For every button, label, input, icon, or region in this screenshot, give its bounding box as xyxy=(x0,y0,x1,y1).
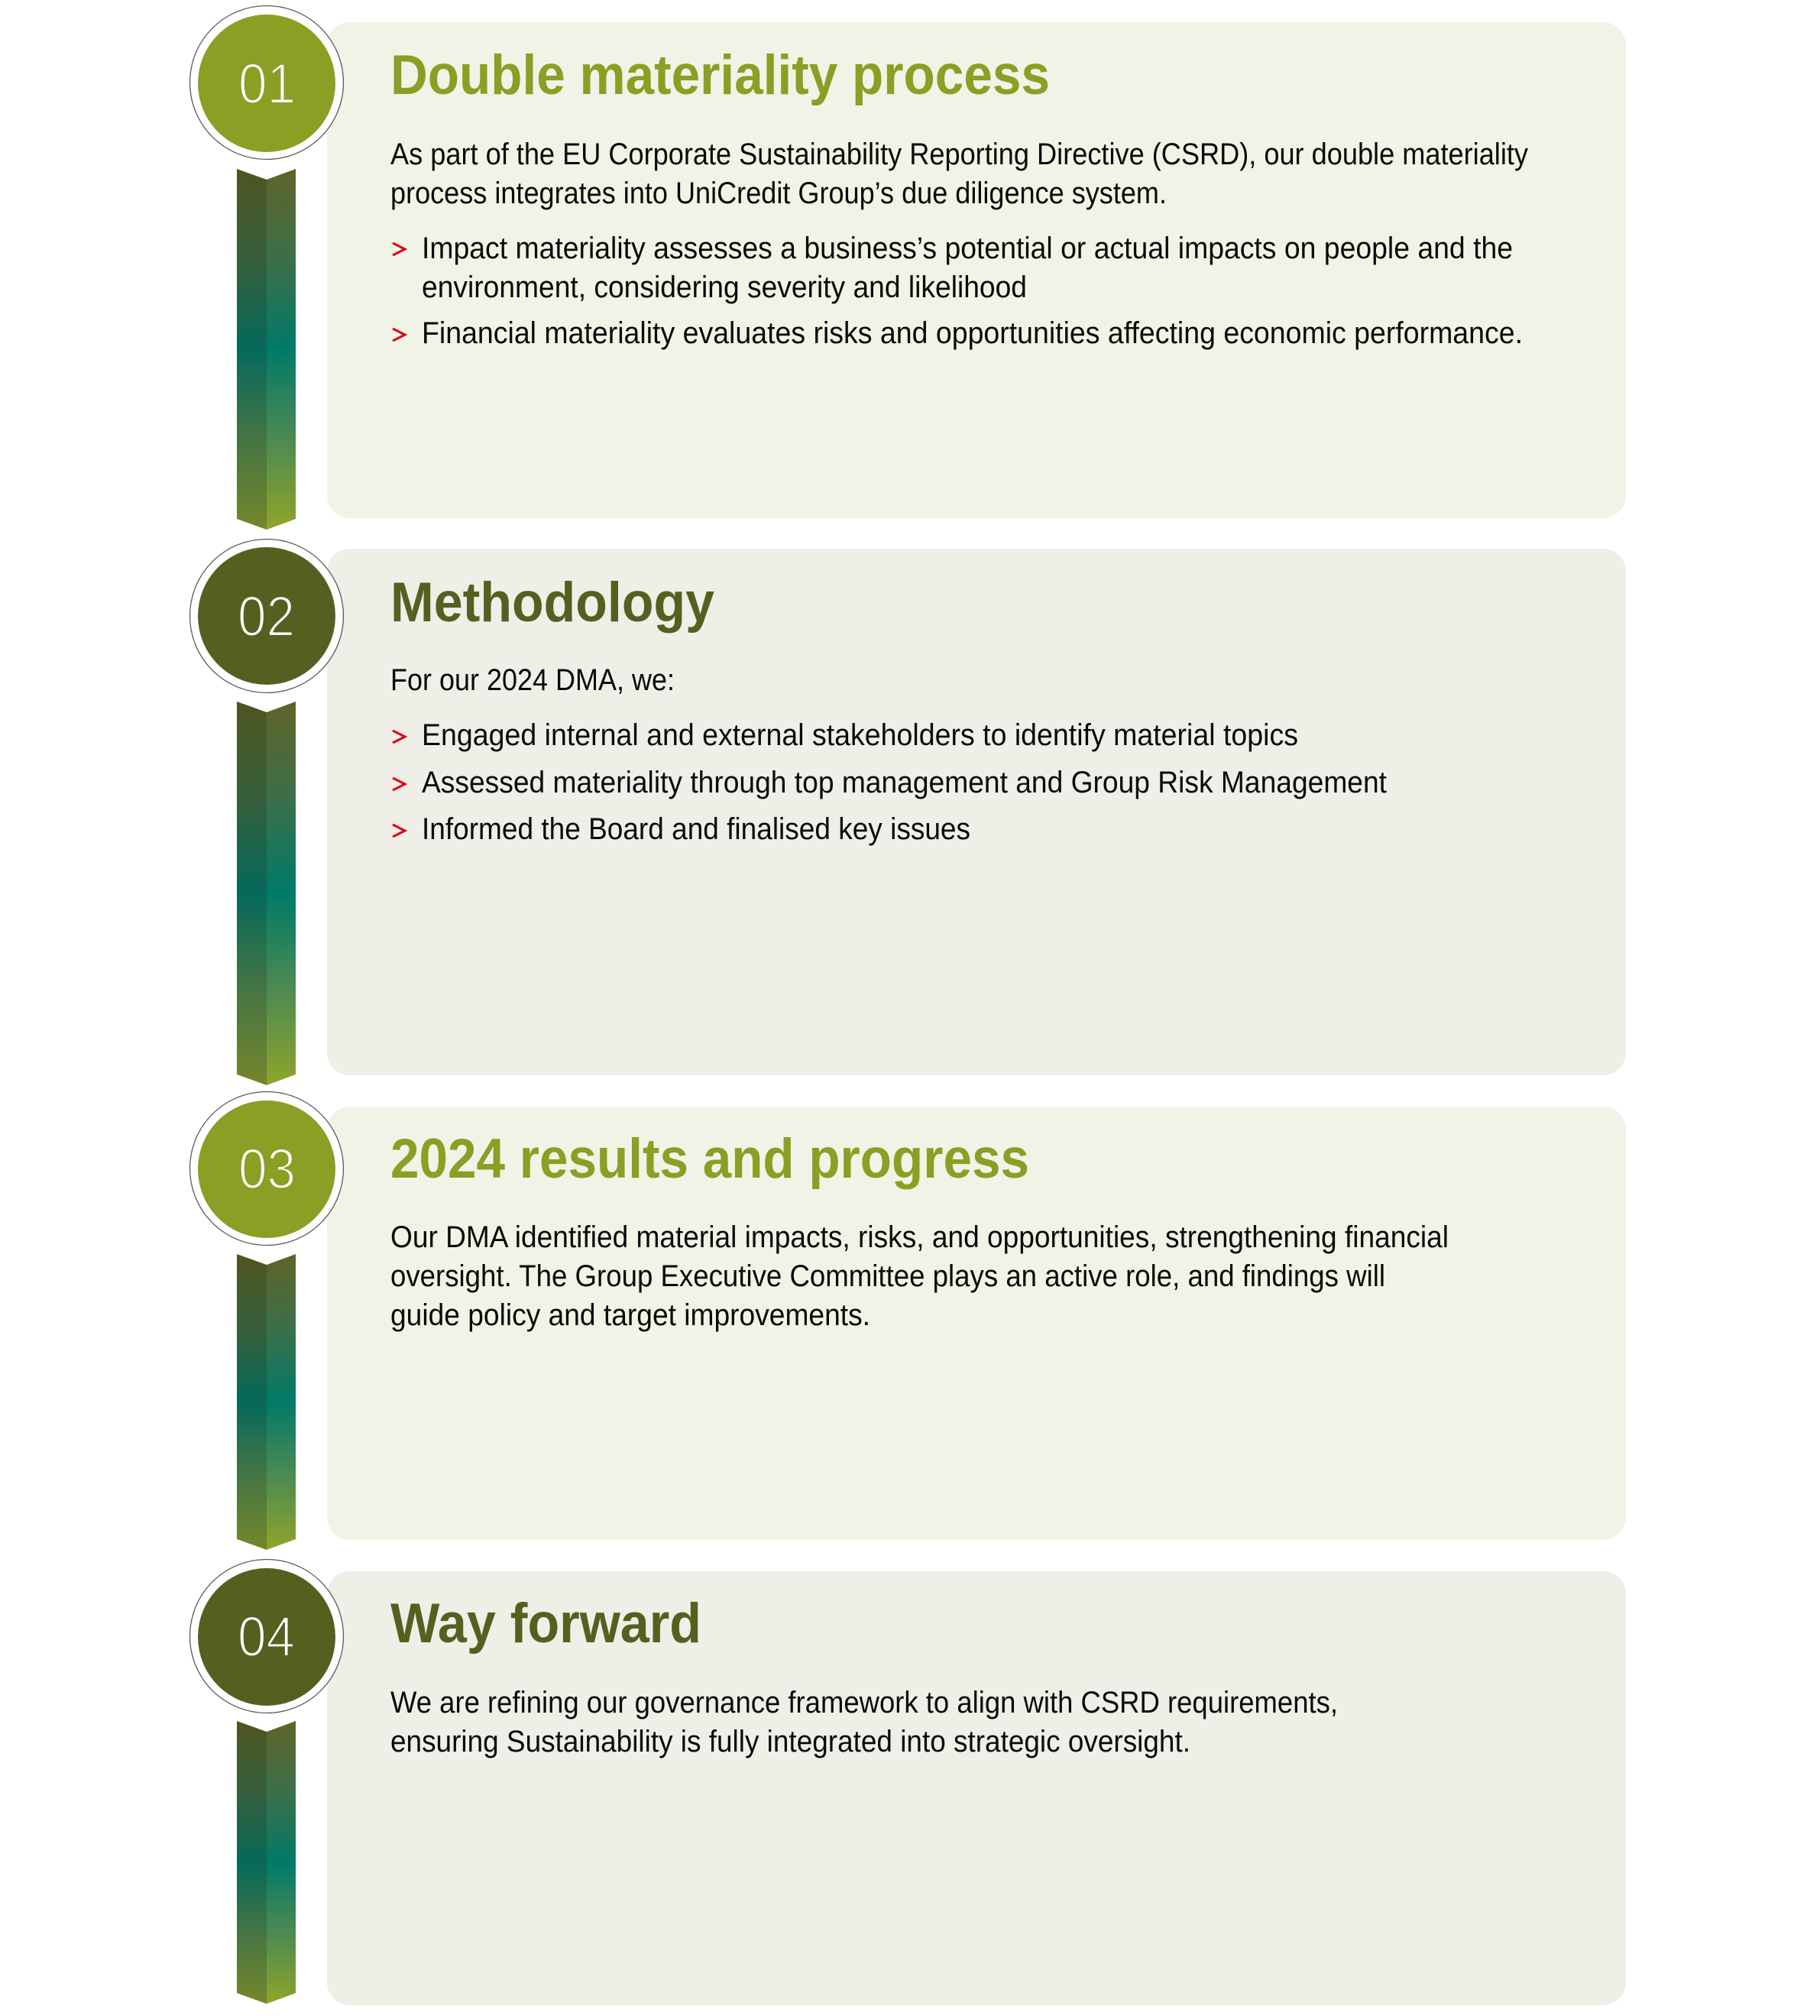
badge: 04 xyxy=(189,1559,344,1713)
bullet: impact materiality: environment, considering severity and likelihood xyxy=(422,271,1027,304)
bullet: assessed: Assessed materiality through top management and Group Risk Management xyxy=(422,766,1387,799)
text block: results: guide policy and target improvements. xyxy=(390,1298,870,1332)
heading: double materiality process: Double materiality process xyxy=(390,44,1050,106)
text block: way forward xyxy=(390,1686,1338,1758)
bullet: informed: Informed the Board and finalised key issues xyxy=(422,812,970,846)
text block: results: oversight. The Group Executive Committee plays an active role, and findings will xyxy=(390,1259,1385,1293)
bullet: engaged: Engaged internal and external stakeholders to identify material topics xyxy=(422,718,1298,752)
panel: methodology xyxy=(327,549,1626,1075)
arrow: ribbon 4 xyxy=(237,1721,296,2004)
badge: 03: 03 xyxy=(238,1137,296,1201)
arrow: ribbon 1 xyxy=(237,169,296,530)
bullet: impact materiality xyxy=(393,232,1513,304)
text block: way forward: ensuring Sustainability is fully integrated into strategic oversight. xyxy=(390,1725,1190,1758)
text block: way forward: We are refining our governance framework to align with CSRD requirements, xyxy=(390,1686,1338,1719)
arrow: ribbon 3 xyxy=(237,1254,296,1550)
text block: intro: process integrates into UniCredit Group’s due diligence system. xyxy=(390,177,1167,210)
badge: 02 xyxy=(189,540,344,692)
panel: way forward xyxy=(327,1571,1626,2005)
badge: 04: 04 xyxy=(238,1605,295,1668)
badge: 01: 01 xyxy=(238,52,296,115)
badge: 01 xyxy=(189,6,344,159)
text block: results xyxy=(390,1220,1449,1332)
panel: double materiality process xyxy=(327,22,1626,518)
bullet: financial materiality: Financial materiality evaluates risks and opportunities affecting economic performance. xyxy=(422,316,1523,350)
arrow: ribbon 2 xyxy=(237,702,296,1085)
panel: 2024 results and progress xyxy=(327,1107,1626,1540)
text block: results: Our DMA identified material impacts, risks, and opportunities, strengthening financial xyxy=(390,1220,1449,1254)
text block: for our 2024 DMA: For our 2024 DMA, we: xyxy=(390,663,675,697)
text block: intro: As part of the EU Corporate Sustainability Reporting Directive (CSRD), our double materiality xyxy=(390,138,1528,171)
heading: way forward: Way forward xyxy=(390,1593,701,1655)
text block: intro xyxy=(390,138,1528,210)
heading: methodology: Methodology xyxy=(390,572,714,634)
badge: 03 xyxy=(189,1091,344,1246)
heading: 2024 results and progress: 2024 results and progress xyxy=(390,1128,1029,1190)
bullet: impact materiality: Impact materiality assesses a business’s potential or actual impacts on people and the xyxy=(422,232,1513,265)
badge: 02: 02 xyxy=(238,585,295,648)
